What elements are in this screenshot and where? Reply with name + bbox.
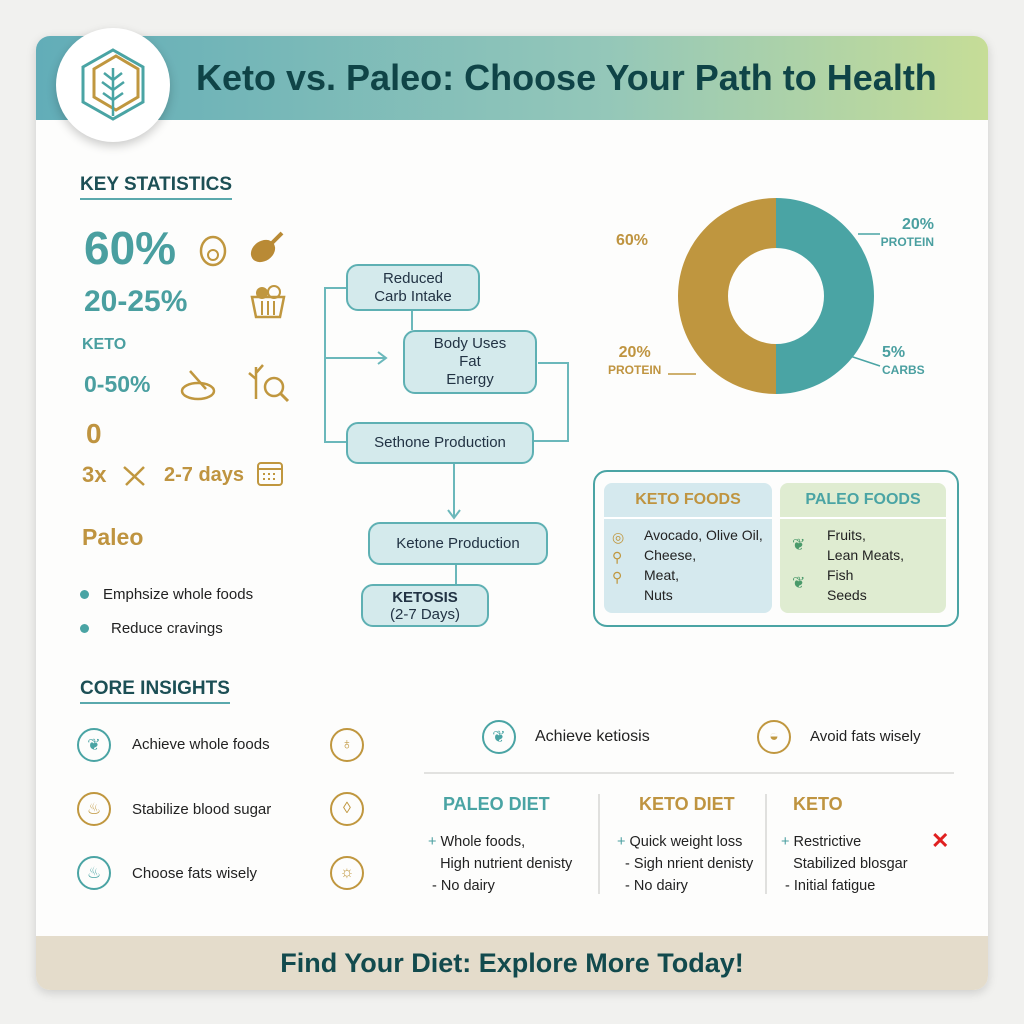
stats block: KETO: [82, 336, 126, 353]
footer band: [36, 936, 988, 990]
core insights heading: CORE INSIGHTS: [80, 678, 230, 699]
box: body uses fat: Energy: [446, 371, 494, 388]
icon: avocado: [200, 236, 226, 266]
icon: cross utensils: [123, 466, 145, 486]
comparison table: [428, 794, 949, 894]
keto diet column: - Sigh nrient denisty: [625, 856, 753, 872]
core insights list: Achieve whole foods: [132, 736, 270, 753]
donut chart: 20%: [619, 344, 651, 361]
insights row: [482, 720, 921, 754]
icon: basket: [250, 285, 286, 318]
stats block: 60%: [84, 222, 176, 274]
key statistics heading: KEY STATISTICS: [80, 174, 232, 195]
stats block: 0: [86, 418, 102, 449]
donut chart: [608, 198, 934, 394]
box: sethone: Sethone Production: [374, 434, 506, 451]
keto column: [781, 794, 949, 894]
core insights list: Stabilize blood sugar: [132, 801, 271, 818]
icon: plant search: [248, 364, 289, 402]
footer band: Find Your Diet: Explore More Today!: [280, 948, 744, 978]
donut chart: PROTEIN: [881, 235, 934, 249]
keto column: KETO: [793, 794, 843, 814]
box: body uses fat: Body Uses: [434, 335, 506, 352]
keto foods: ⚲: [612, 549, 622, 565]
donut chart: CARBS: [882, 363, 925, 377]
keto foods: KETO FOODS: [635, 491, 741, 508]
core insights list: [77, 728, 364, 890]
box: body uses fat: [403, 330, 537, 394]
keto foods: Nuts: [644, 587, 673, 603]
keto column: Stabilized blosgar: [793, 856, 908, 872]
box: ketosis: (2-7 Days): [390, 606, 460, 622]
stats block: Reduce cravings: [111, 620, 223, 637]
core insights list: Choose fats wisely: [132, 865, 257, 882]
paleo diet column: PALEO DIET: [443, 794, 550, 814]
keto diet column: + Quick weight loss: [617, 834, 742, 850]
paleo diet column: [428, 794, 572, 894]
insights row: Achieve ketiosis: [535, 728, 650, 745]
box: body uses fat: Fat: [459, 353, 481, 370]
keto diet column: KETO DIET: [639, 794, 735, 814]
paleo diet column: High nutrient denisty: [440, 856, 572, 872]
stats block: Paleo: [82, 524, 143, 550]
box: ketone: Ketone Production: [396, 534, 520, 552]
stats block: 2-7 days: [164, 464, 244, 486]
icon: bread: [180, 370, 216, 400]
paleo foods: ❦: [792, 537, 805, 554]
paleo foods: Lean Meats,: [827, 547, 904, 563]
donut chart: 60%: [616, 232, 648, 249]
core insights list: ☼: [340, 864, 354, 881]
keto column: ✕: [931, 828, 949, 853]
paleo foods: Seeds: [827, 587, 867, 603]
core insights list: ♨: [87, 801, 101, 818]
core insights list: ◊: [343, 800, 351, 817]
keto foods: Meat,: [644, 567, 679, 583]
keto foods: [604, 483, 772, 613]
paleo diet column: + Whole foods,: [428, 834, 525, 850]
paleo foods: ❦: [792, 575, 805, 592]
paleo foods: Fruits,: [827, 527, 866, 543]
keto foods: ⚲: [612, 569, 622, 585]
box: reduced carb: [346, 264, 480, 311]
donut chart: 5%: [882, 344, 905, 361]
insights row: ❦: [492, 729, 506, 746]
flowchart: [324, 264, 569, 627]
header band: [36, 36, 988, 120]
stats block: 20-25%: [84, 285, 187, 318]
paleo foods: Fish: [827, 567, 853, 583]
keto diet column: [617, 794, 754, 894]
box: ketosis: [361, 584, 489, 627]
keto column: + Restrictive: [781, 834, 861, 850]
box: reduced carb: Reduced: [383, 270, 443, 286]
keto foods: ◎: [612, 529, 624, 545]
title: Keto vs. Paleo: Choose Your Path to Health: [196, 57, 937, 98]
stats block: 0-50%: [84, 371, 150, 397]
donut chart: PROTEIN: [608, 363, 661, 377]
stats block: 3x: [82, 462, 106, 487]
foods panel: [593, 470, 959, 627]
bullet list: Emphsize whole foods: [103, 586, 253, 603]
logo: [56, 28, 170, 142]
paleo diet column: - No dairy: [432, 878, 495, 894]
icon: calendar: [257, 462, 283, 486]
box: ketosis: KETOSIS: [392, 588, 458, 606]
keto foods: Cheese,: [644, 547, 696, 563]
keto foods: Avocado, Olive Oil,: [644, 527, 763, 543]
paleo foods: [780, 483, 946, 613]
paleo foods: PALEO FOODS: [805, 491, 921, 508]
keto diet column: - No dairy: [625, 878, 688, 894]
stats block: [80, 222, 289, 637]
keto column: - Initial fatigue: [785, 878, 875, 894]
box: reduced carb: Carb Intake: [374, 288, 452, 304]
box: ketone: [368, 522, 548, 565]
icon: drumstick: [250, 232, 284, 262]
insights row: Avoid fats wisely: [810, 728, 921, 745]
core insights list: ❦: [87, 737, 101, 754]
donut chart: 20%: [902, 216, 934, 233]
core insights list: ♨: [87, 865, 101, 882]
insights row: ◒: [769, 728, 779, 745]
box: sethone: [346, 422, 534, 464]
core insights list: ♁: [341, 736, 353, 753]
